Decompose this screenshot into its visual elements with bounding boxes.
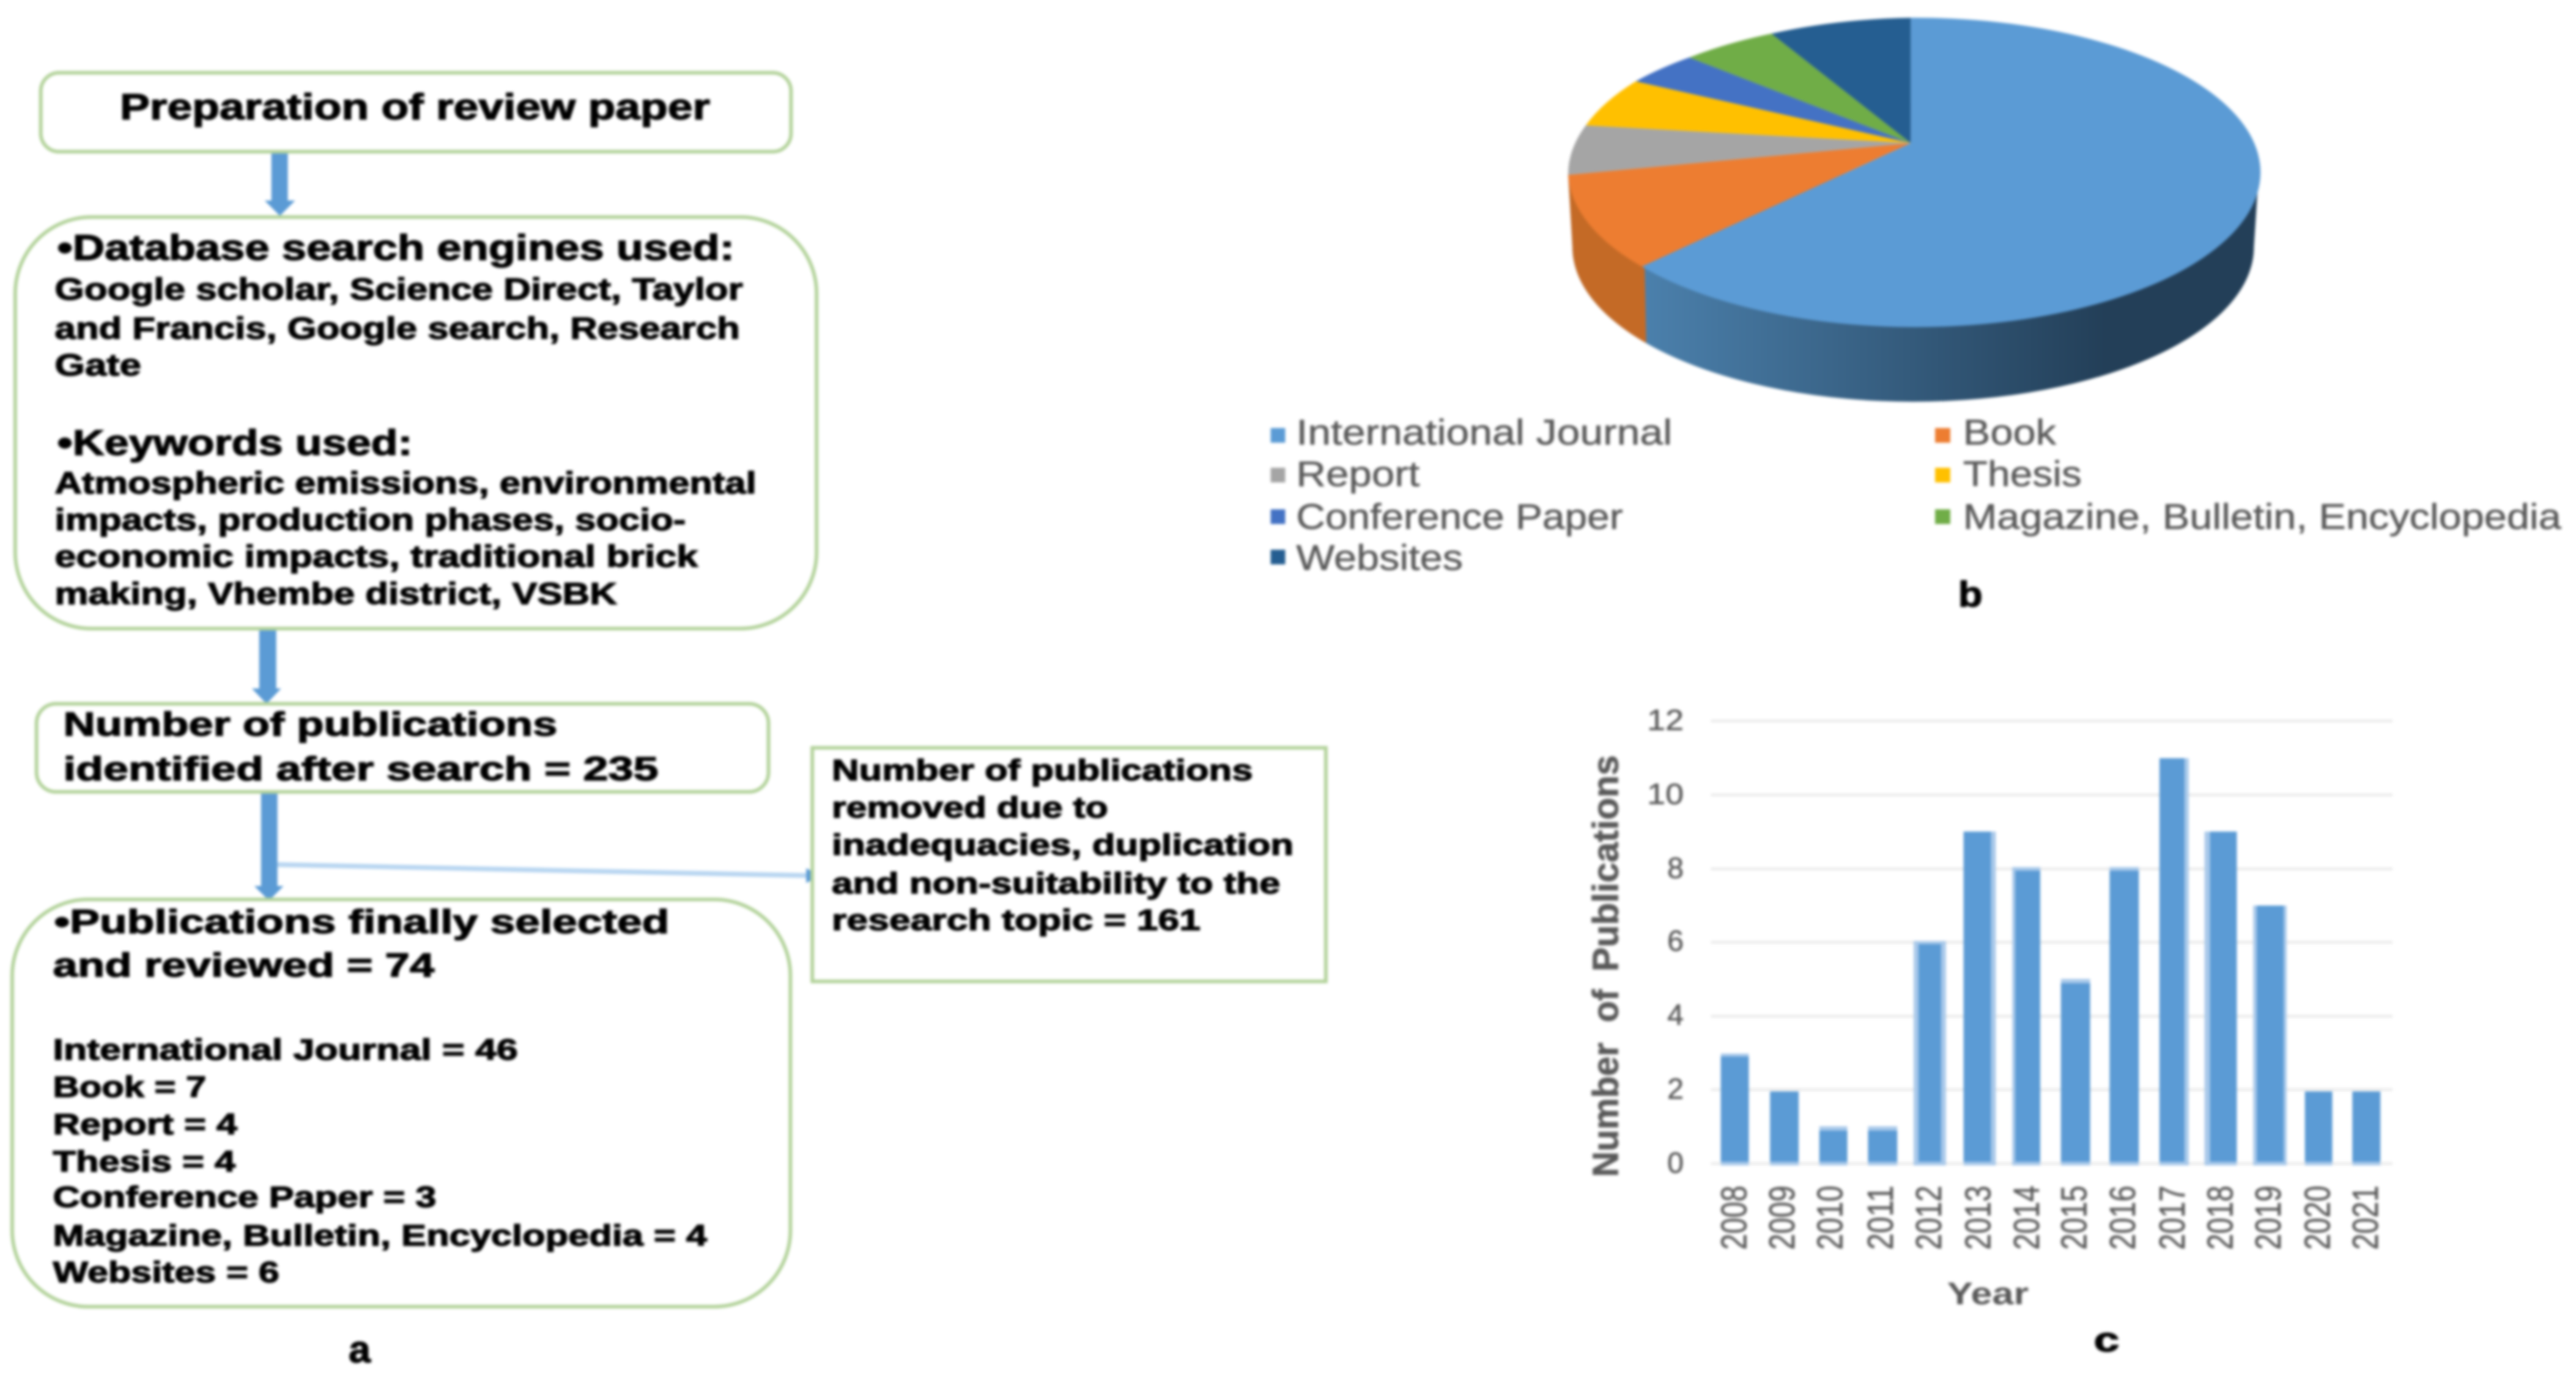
- bars: [1721, 758, 2380, 1165]
- arrow: identified to selected: [254, 792, 284, 901]
- text: publication counts by type: [53, 1034, 708, 1289]
- text: keywords list: [55, 466, 757, 611]
- slice: book: [1568, 143, 1911, 267]
- text: search engines list: Google scholar, Science Direct, Taylor: [55, 272, 743, 306]
- panel label a: a: [349, 1329, 371, 1371]
- box: publications removed: and non-suitability to the: [832, 868, 1280, 900]
- text: search engines list: Gate: [55, 348, 141, 382]
- box: publications identified: [37, 704, 769, 792]
- x axis year labels: 2012: [1908, 1186, 1949, 1250]
- heading: database search engines: •Database search engines used:: [57, 229, 735, 268]
- y axis tick labels: 2: [1667, 1073, 1684, 1106]
- pie side wall: [1568, 172, 2259, 402]
- text: keywords list: making, Vhembe district, VSBK: [55, 577, 617, 611]
- text: keywords list: economic impacts, traditional brick: [55, 539, 698, 574]
- chart: 3D pie: [1568, 18, 2260, 402]
- panel b: publication type pie chart: [1271, 18, 2562, 615]
- slice: magazine, bulletin, encyclopedia: [1689, 34, 1911, 143]
- box: publications identified: Number of publications: [63, 705, 557, 743]
- heading: keywords: •Keywords used:: [57, 424, 413, 463]
- text: search engines list: [55, 272, 743, 382]
- slice: conference paper: [1636, 57, 1911, 143]
- y axis title: Number: [1585, 1043, 1626, 1177]
- y axis tick labels: 10: [1647, 778, 1684, 811]
- x axis year labels: 2018: [2199, 1186, 2240, 1250]
- heading: final selection: •Publications finally selected: [54, 903, 669, 940]
- slice: thesis: [1586, 81, 1911, 143]
- x axis year labels: 2015: [2054, 1186, 2095, 1250]
- slice: international journal: [1641, 18, 2260, 327]
- text: publication counts by type: Conference Paper = 3: [53, 1181, 436, 1214]
- y axis title: [1585, 755, 1626, 1177]
- x axis year labels: [1714, 1186, 2386, 1250]
- box: publications selected and reviewed: [12, 899, 790, 1307]
- legend: Report: [1296, 455, 1419, 494]
- x axis year labels: 2021: [2345, 1186, 2386, 1250]
- box: publications removed: [812, 748, 1326, 981]
- heading: final selection: and reviewed = 74: [53, 946, 435, 984]
- panel a: methodology flowchart: [12, 73, 1326, 1371]
- arrow: search to identified publications: [252, 629, 281, 704]
- box: publications removed: research topic = 161: [832, 904, 1201, 937]
- box: database search engines and keywords: [15, 217, 816, 629]
- x axis year labels: 2009: [1761, 1186, 1802, 1250]
- y axis title: Publications: [1585, 755, 1626, 972]
- legend: Websites: [1296, 539, 1463, 578]
- legend: Thesis: [1963, 455, 2082, 494]
- box: preparation of review paper: Preparation of review paper: [120, 87, 710, 127]
- y axis tick labels: 0: [1667, 1147, 1684, 1179]
- panel label c: c: [2094, 1320, 2119, 1359]
- x axis year labels: 2016: [2102, 1186, 2143, 1250]
- legend: Conference Paper: [1296, 498, 1623, 537]
- y axis tick labels: 6: [1667, 925, 1684, 958]
- y axis tick labels: 12: [1647, 704, 1684, 737]
- panel c: publications per year bar chart: [1585, 704, 2393, 1359]
- x axis year labels: 2008: [1714, 1186, 1754, 1250]
- x axis year labels: 2020: [2297, 1186, 2338, 1250]
- text: search engines list: and Francis, Google search, Research: [55, 311, 740, 345]
- text: keywords list: Atmospheric emissions, environmental: [55, 466, 757, 500]
- text: keywords list: impacts, production phases, socio-: [55, 503, 686, 537]
- slice: websites: [1771, 18, 1911, 143]
- x axis year labels: 2013: [1958, 1186, 1998, 1250]
- box: publications removed: inadequacies, duplication: [832, 829, 1294, 862]
- box: publications identified: identified after search = 235: [63, 750, 658, 788]
- x axis year labels: 2010: [1810, 1186, 1851, 1250]
- box: publications removed: removed due to: [832, 792, 1108, 824]
- heading: final selection: [53, 903, 669, 984]
- x axis year labels: 2011: [1860, 1186, 1901, 1250]
- box: preparation of review paper: [41, 73, 791, 152]
- text: publication counts by type: Websites = 6: [53, 1257, 279, 1289]
- legend: Magazine, Bulletin, Encyclopedia: [1963, 498, 2562, 537]
- x axis year labels: 2019: [2248, 1186, 2289, 1250]
- slice: report: [1568, 125, 1911, 175]
- x axis year labels: 2017: [2152, 1186, 2193, 1250]
- pie side wall: book slice: [1567, 180, 1648, 344]
- text: publication counts by type: Thesis = 4: [53, 1146, 236, 1178]
- legend: Book: [1963, 413, 2056, 452]
- text: publication counts by type: International Journal = 46: [53, 1034, 518, 1066]
- y axis tick labels: 4: [1667, 999, 1684, 1032]
- panel label b: b: [1958, 575, 1983, 615]
- y axis title: of: [1585, 989, 1626, 1022]
- legend: [1271, 413, 2562, 578]
- text: publication counts by type: Magazine, Bulletin, Encyclopedia = 4: [53, 1220, 708, 1252]
- text: publication counts by type: Book = 7: [53, 1071, 206, 1104]
- y axis tick labels: 8: [1667, 852, 1684, 885]
- text: publication counts by type: Report = 4: [53, 1109, 237, 1141]
- arrow: removed publications branch: [278, 865, 821, 883]
- arrow: preparation to search: [265, 152, 295, 216]
- x axis title: Year: [1947, 1276, 2029, 1311]
- box: publications removed: Number of publications: [832, 755, 1253, 787]
- y axis tick labels: [1647, 704, 1684, 1179]
- x axis year labels: 2014: [2006, 1186, 2047, 1250]
- legend: International Journal: [1296, 413, 1672, 452]
